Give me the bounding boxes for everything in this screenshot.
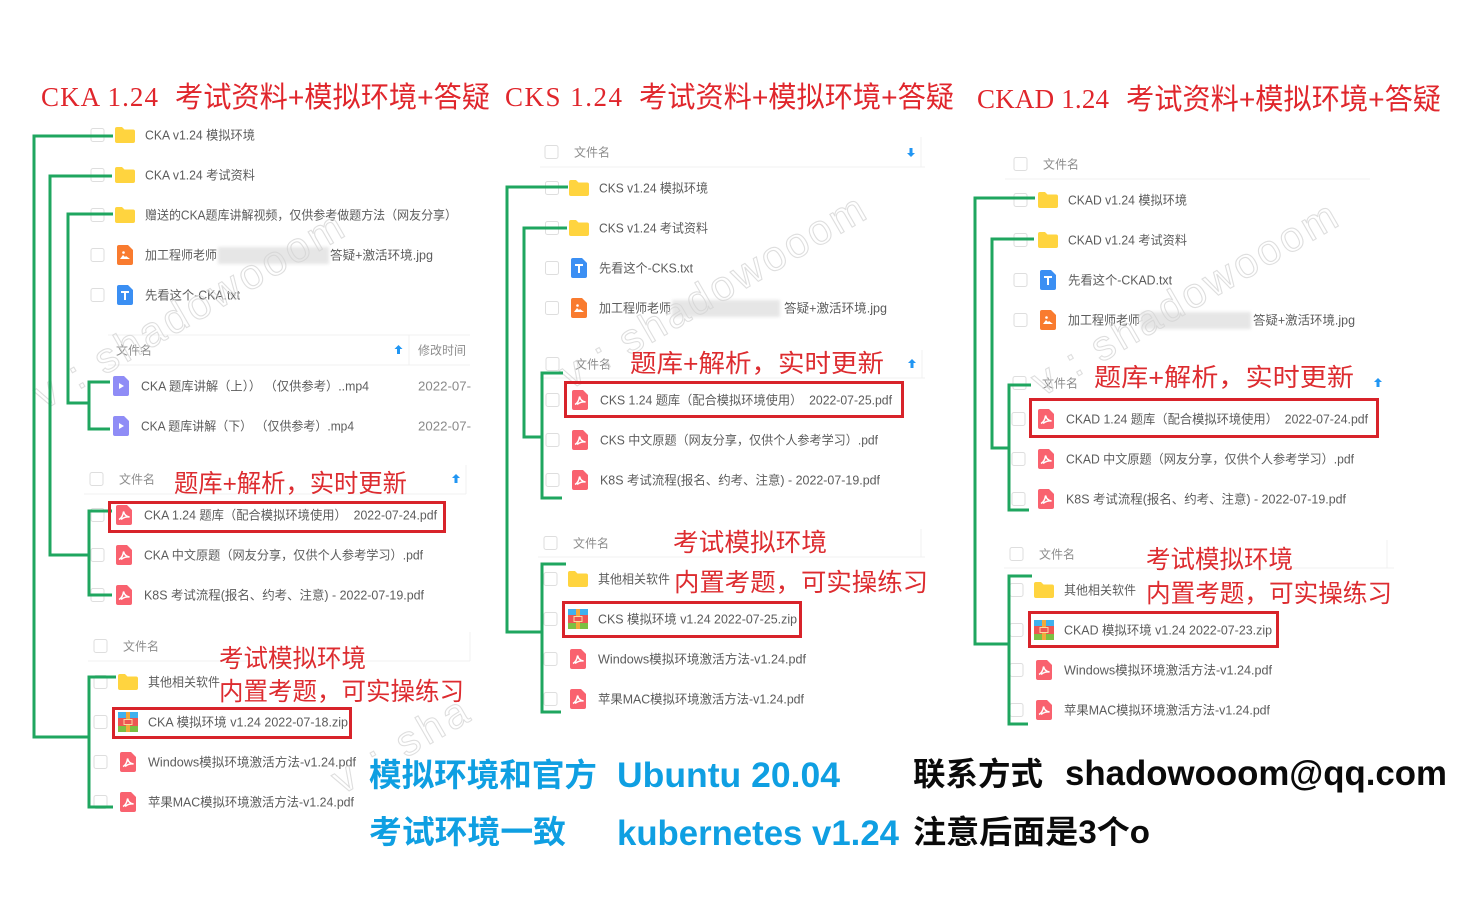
file row: K8S exam process pdf	[546, 470, 881, 490]
file row: CKA question bank pdf: CKA 1.24 题库（配合模拟环境使用） 2022-07-24.pdf	[144, 508, 438, 522]
connector lines: CKA tree	[34, 136, 116, 807]
file row: Mac activation pdf: 苹果MAC模拟环境激活方法-v1.24.pdf	[148, 794, 355, 810]
file row: Mac activation pdf: 苹果MAC模拟环境激活方法-v1.24.pdf	[1064, 702, 1271, 718]
table header: simulation: 文件名	[123, 638, 159, 654]
file row: CKS question bank pdf: CKS 1.24 题库（配合模拟环境使用） 2022-07-25.pdf	[600, 392, 893, 408]
file row: CKS question bank pdf	[546, 390, 893, 410]
file row: Mac activation pdf: 苹果MAC模拟环境激活方法-v1.24.pdf	[598, 692, 805, 706]
footer note: environment matches official	[369, 756, 900, 853]
file row: CKA simulation folder	[91, 127, 255, 143]
file row: CKA question bank pdf	[91, 505, 438, 525]
callout: CKS question bank note: 题库+解析，实时更新	[630, 350, 884, 378]
file row: Windows activation pdf	[94, 752, 357, 772]
file row: teacher contact image	[1014, 310, 1355, 330]
table header: videos	[108, 335, 470, 365]
table header: question bank	[1013, 376, 1382, 390]
connector lines: CKS tree	[507, 187, 568, 712]
highlight box: CKS question bank	[566, 382, 902, 416]
title: CKS: 考试资料+模拟环境+答疑	[639, 81, 954, 114]
file row: K8S exam process pdf: K8S 考试流程(报名、约考、注意) - 2022-07-19.pdf	[600, 472, 881, 488]
callout: CKAD simulator note	[1146, 546, 1392, 608]
file row: teacher contact image	[546, 298, 887, 318]
callout: CKS simulator note: 内置考题，可实操练习	[674, 569, 928, 597]
footer note: contact details	[913, 754, 1447, 850]
file row: read-me text file	[1014, 270, 1173, 290]
file row: Mac activation pdf	[544, 689, 805, 709]
file row: CKA Chinese questions pdf: CKA 中文原题（网友分享，仅供个人参考学习）.pdf	[144, 548, 424, 562]
highlight box: CKA question bank	[110, 502, 444, 532]
callout: CKAD simulator note: 考试模拟环境	[1146, 546, 1293, 574]
table header: simulation: 文件名	[573, 536, 609, 550]
file row: Windows activation pdf	[544, 649, 807, 669]
title: CKS: CKS 1.24	[505, 82, 622, 112]
table header: simulation	[1004, 540, 1394, 568]
callout: CKS simulator note	[673, 529, 928, 597]
file row: CKAD question bank pdf	[1012, 409, 1369, 429]
file row: other software folder: 其他相关软件	[1064, 584, 1136, 598]
file row: CKA exam materials folder: CKA v1.24 考试资料	[145, 168, 255, 182]
table header: root	[1005, 156, 1370, 179]
file row: bonus video folder: 赠送的CKA题库讲解视频，仅供参考做题方法（网友分享）	[145, 208, 457, 222]
file row: video part two: CKA 题库讲解（下） （仅供参考）.mp4	[141, 418, 354, 434]
file row: teacher contact image: 加工程师老师	[599, 300, 671, 316]
file row: CKS exam materials folder: CKS v1.24 考试资料	[599, 220, 708, 236]
file row: CKAD exam materials folder: CKAD v1.24 考试资料	[1068, 232, 1187, 248]
file row: teacher contact image: 答疑+激活环境.jpg	[1253, 312, 1355, 328]
file row: read-me text file: 先看这个-CKS.txt	[599, 260, 694, 276]
table header: simulation: 文件名	[1039, 546, 1075, 562]
file row: Windows activation pdf: Windows模拟环境激活方法-v1.24.pdf	[1064, 662, 1273, 678]
highlight box: CKAD simulator	[1030, 612, 1278, 646]
callout: CKS simulator note: 考试模拟环境	[673, 529, 827, 557]
file row: Windows activation pdf: Windows模拟环境激活方法-v1.24.pdf	[148, 754, 357, 770]
file row: teacher contact image	[91, 245, 433, 265]
panel: CKAD file listing	[1004, 156, 1394, 720]
file row: K8S exam process pdf	[91, 585, 425, 605]
file row: Windows activation pdf: Windows模拟环境激活方法-v1.24.pdf	[598, 652, 807, 666]
table header: root	[540, 137, 925, 167]
title: CKA: 考试资料+模拟环境+答疑	[175, 81, 490, 114]
table header: question bank: 文件名	[1042, 376, 1078, 390]
footer note: environment matches official: 模拟环境和官方	[369, 757, 597, 793]
file row: video part two	[113, 416, 471, 436]
file row: CKAD simulation folder	[1014, 192, 1187, 208]
file row: teacher contact image: 加工程师老师	[145, 248, 217, 262]
footer note: environment matches official: Ubuntu 20.04	[617, 756, 841, 795]
highlight box: CKAD question bank	[1030, 400, 1378, 436]
file row: CKAD question bank pdf: CKAD 1.24 题库（配合模拟环境使用） 2022-07-24.pdf	[1066, 412, 1369, 426]
table header: question bank: 文件名	[575, 356, 611, 372]
file row: K8S exam process pdf: K8S 考试流程(报名、约考、注意) - 2022-07-19.pdf	[144, 588, 425, 602]
watermark: shadowooom	[25, 185, 1345, 803]
title: CKAD: CKAD 1.24	[977, 84, 1110, 114]
callout: CKAD question bank note: 题库+解析，实时更新	[1094, 364, 1354, 392]
watermark: shadowooom: v : shadowooom	[551, 185, 873, 398]
file row: video part one	[113, 376, 471, 396]
file row: teacher contact image: 加工程师老师	[1068, 312, 1140, 328]
title: CKA: CKA 1.24	[41, 82, 158, 112]
file row: CKA Chinese questions pdf	[91, 545, 424, 565]
highlight box: CKS simulator	[564, 602, 800, 636]
callout: CKA simulator note: 考试模拟环境	[219, 645, 366, 673]
file row: CKAD Chinese questions pdf	[1012, 449, 1355, 469]
file row: other software folder	[544, 571, 670, 587]
watermark: shadowooom: v : sha	[323, 687, 477, 803]
table header: root: 文件名	[1043, 156, 1079, 172]
file row: CKAD simulator zip: CKAD 模拟环境 v1.24 2022-07-23.zip	[1064, 622, 1272, 638]
file row: CKS simulator zip	[544, 609, 797, 629]
file row: video part two: 2022-07-	[418, 420, 471, 434]
file row: other software folder: 其他相关软件	[148, 676, 220, 690]
file row: CKA simulator zip	[94, 712, 348, 732]
file row: CKAD simulator zip	[1010, 620, 1272, 640]
panel: CKS file listing	[538, 137, 925, 709]
file row: video part one: CKA 题库讲解（上）） （仅供参考）..mp4	[141, 378, 369, 394]
title: CKA	[41, 81, 490, 114]
file row: K8S exam process pdf: K8S 考试流程(报名、约考、注意) - 2022-07-19.pdf	[1066, 492, 1347, 506]
table header: question bank	[84, 465, 466, 494]
file row: other software folder: 其他相关软件	[598, 572, 670, 586]
file row: K8S exam process pdf	[1012, 489, 1347, 509]
footer note: environment matches official: kubernetes v1.24	[617, 814, 900, 853]
file row: Mac activation pdf	[94, 792, 355, 812]
table header: simulation	[538, 529, 925, 557]
highlight box: CKA simulator	[114, 708, 350, 738]
file row: other software folder	[1010, 582, 1136, 598]
file row: read-me text file: 先看这个-CKA.txt	[145, 288, 241, 302]
table header: simulation	[88, 632, 470, 661]
footer note: contact details: shadowooom@qq.com	[1065, 754, 1447, 793]
footer note: environment matches official: 考试环境一致	[369, 814, 566, 850]
table header: root: 文件名	[574, 144, 610, 160]
file row: Mac activation pdf	[1010, 700, 1271, 720]
file row: teacher contact image: 答疑+激活环境.jpg	[784, 300, 887, 316]
file row: teacher contact image: 答疑+激活环境.jpg	[330, 248, 433, 262]
file row: video part one: 2022-07-	[418, 380, 471, 394]
table header: question bank: 文件名	[119, 472, 155, 486]
file row: CKS exam materials folder	[546, 220, 708, 236]
file row: read-me text file	[546, 258, 694, 278]
callout: CKA question bank note: 题库+解析，实时更新	[174, 470, 407, 498]
title: CKS	[505, 81, 954, 114]
title: CKAD: 考试资料+模拟环境+答疑	[1126, 83, 1441, 116]
callout: CKA simulator note: 内置考题，可实操练习	[219, 678, 464, 706]
footer note: contact details: 注意后面是3个o	[913, 814, 1150, 850]
file row: CKS Chinese questions pdf: CKS 中文原题（网友分享，仅供个人参考学习）.pdf	[600, 432, 879, 448]
file row: CKS Chinese questions pdf	[546, 430, 879, 450]
file row: read-me text file	[91, 285, 241, 305]
file row: CKAD simulation folder: CKAD v1.24 模拟环境	[1068, 192, 1187, 208]
file row: CKS simulator zip: CKS 模拟环境 v1.24 2022-07-25.zip	[598, 612, 797, 626]
file row: Windows activation pdf	[1010, 660, 1273, 680]
table header: question bank	[540, 350, 925, 378]
connector lines: CKAD tree	[975, 198, 1035, 724]
watermark: shadowooom: v : shadowooom	[25, 202, 352, 418]
file row: CKA exam materials folder	[91, 167, 255, 183]
footer note: contact details: 联系方式	[913, 756, 1043, 792]
table header: videos: 文件名	[116, 342, 152, 358]
title: CKAD	[977, 83, 1441, 116]
panel: CKA file listing	[84, 127, 471, 812]
file row: CKA simulation folder: CKA v1.24 模拟环境	[145, 128, 255, 142]
table header: videos: 修改时间	[418, 342, 466, 358]
callout: CKAD simulator note: 内置考题，可实操练习	[1146, 580, 1392, 608]
file row: CKAD exam materials folder	[1014, 232, 1187, 248]
callout: CKA simulator note	[219, 645, 464, 706]
file row: CKA simulator zip: CKA 模拟环境 v1.24 2022-07-18.zip	[148, 714, 348, 730]
watermark: shadowooom: v : shadowooom	[1023, 192, 1345, 405]
file row: CKS simulation folder	[546, 180, 708, 196]
file row: other software folder	[94, 674, 220, 690]
file row: CKAD Chinese questions pdf: CKAD 中文原题（网友分享，仅供个人参考学习）.pdf	[1066, 452, 1355, 466]
file row: CKS simulation folder: CKS v1.24 模拟环境	[599, 180, 708, 196]
file row: read-me text file: 先看这个-CKAD.txt	[1068, 272, 1173, 288]
